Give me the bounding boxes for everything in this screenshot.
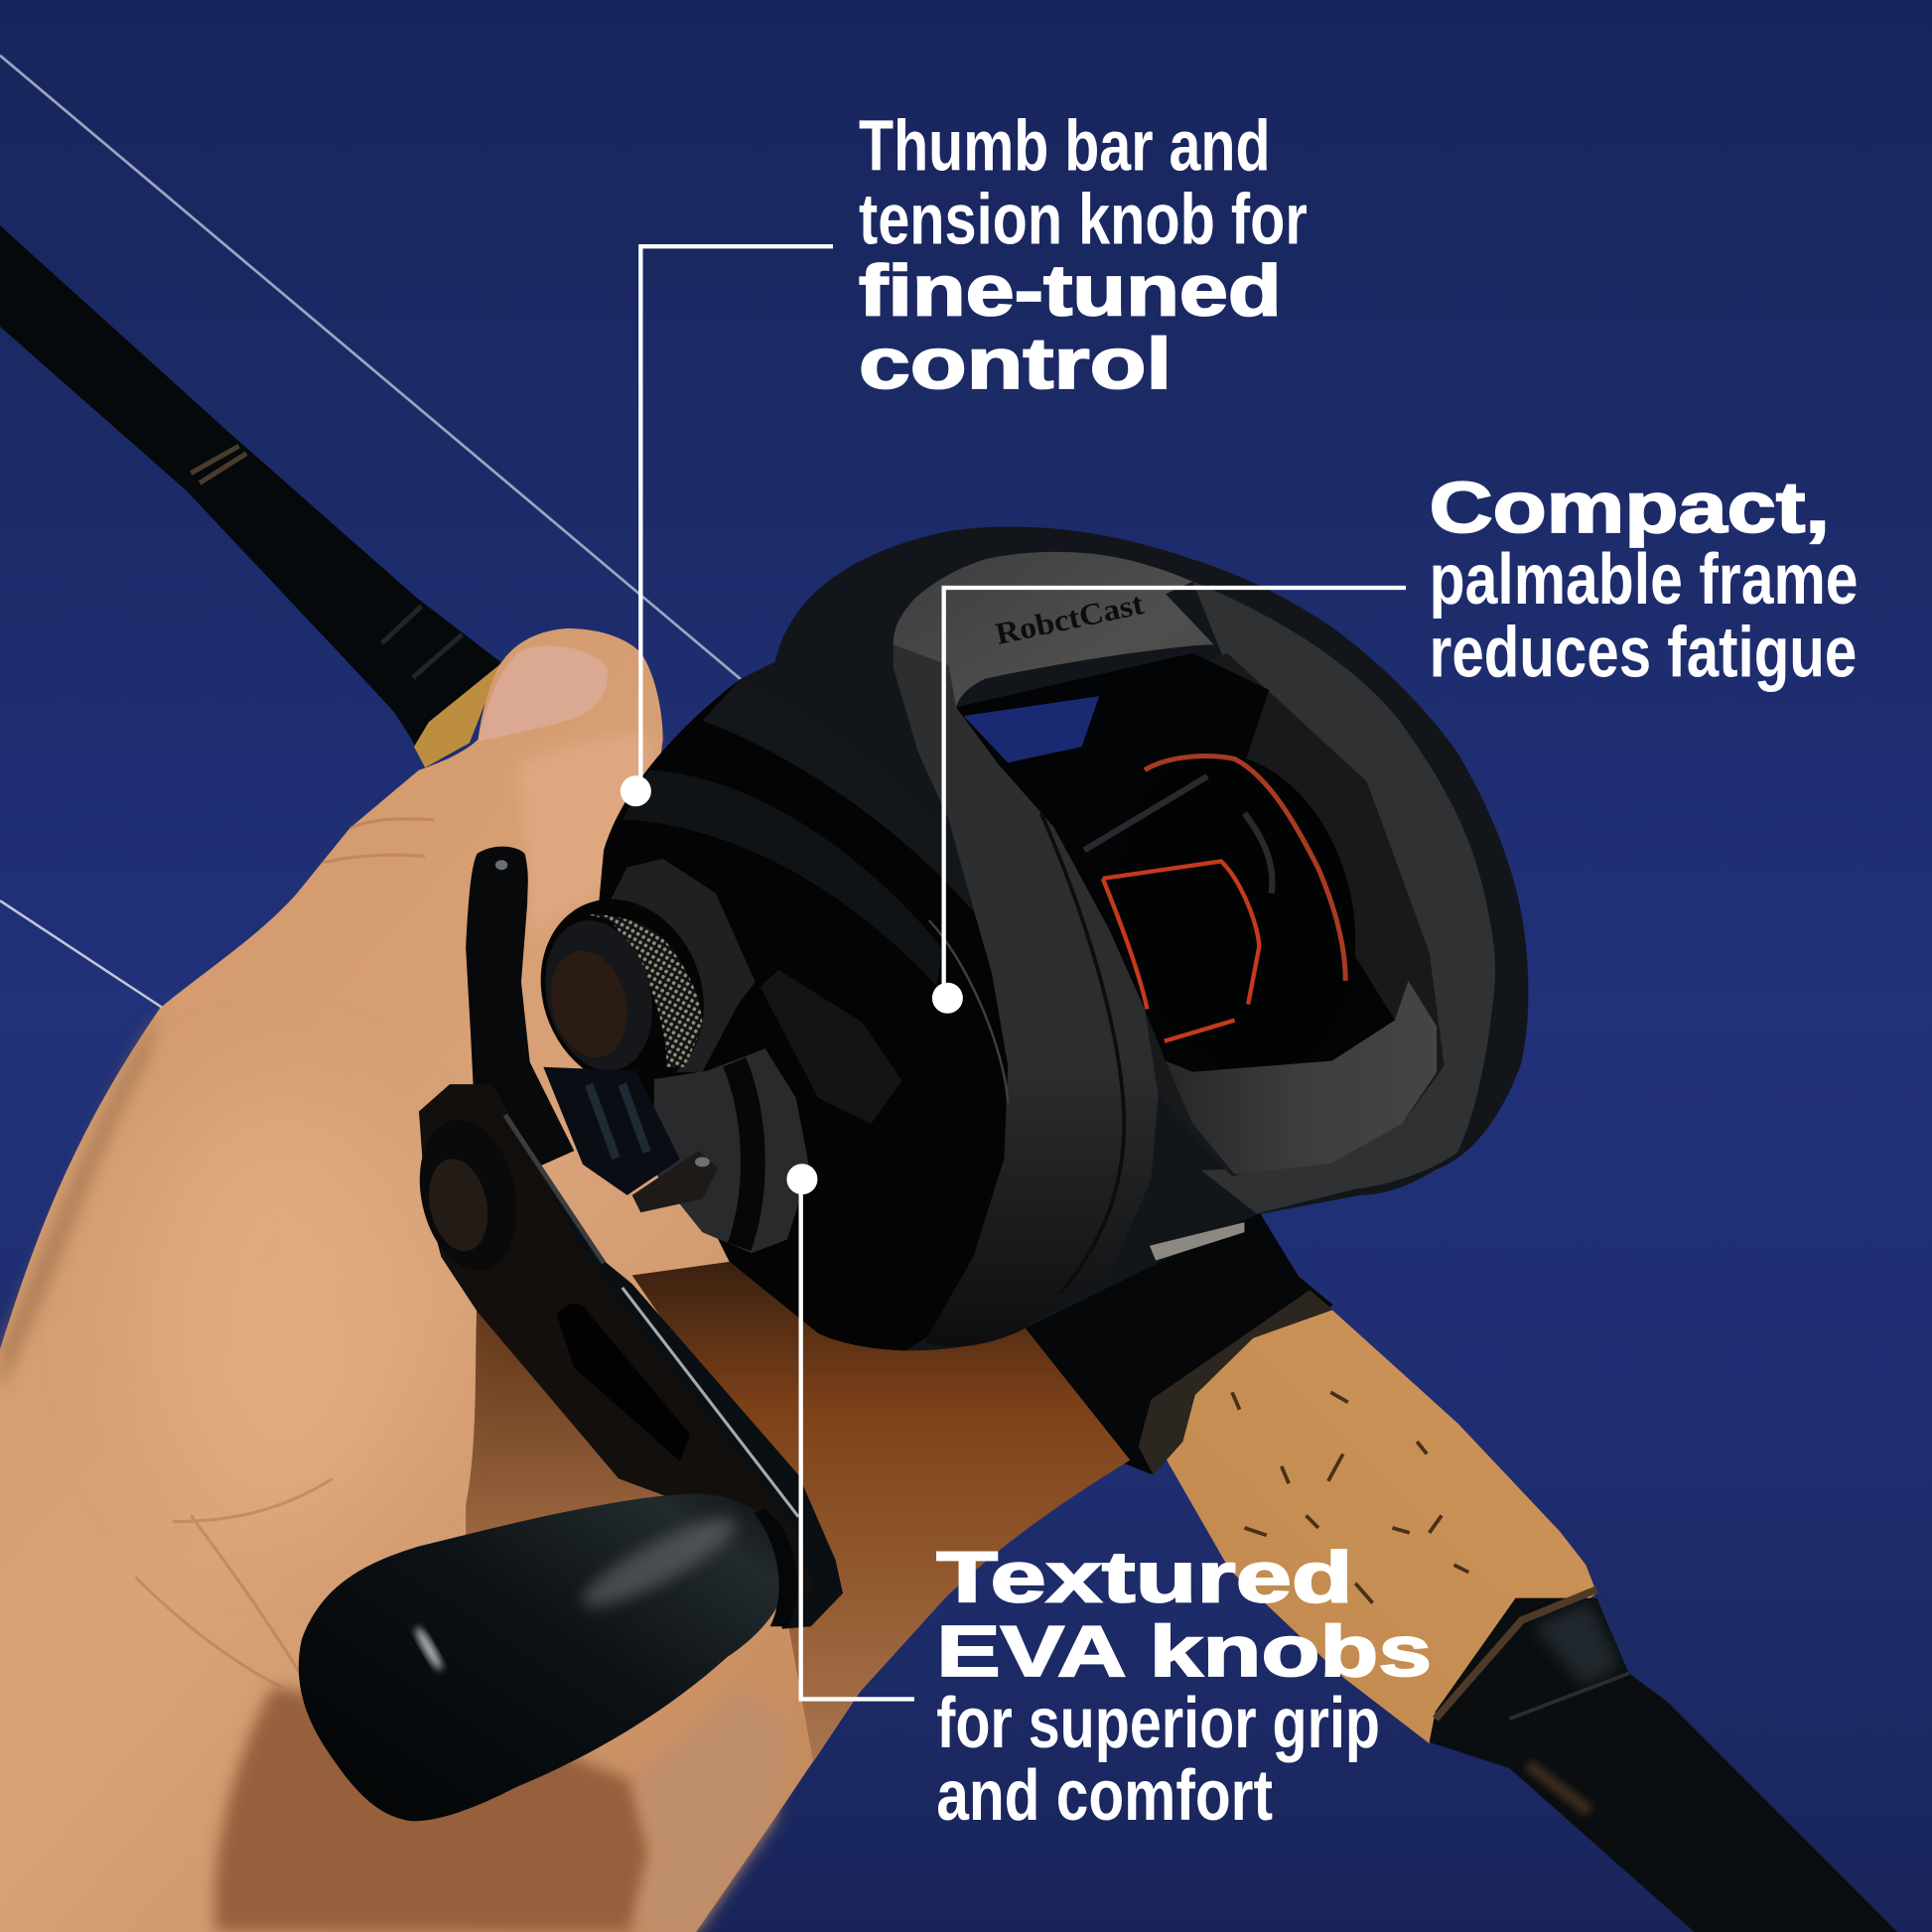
callout: thumb bar and tension knob: control <box>859 325 1172 404</box>
spool disc <box>1087 728 1389 1096</box>
palm shade at left edge <box>0 1008 160 1392</box>
lower grey thumb rest <box>1166 981 1437 1174</box>
handle knob <box>299 1493 797 1821</box>
callout: EVA knobs: Textured <box>936 1538 1353 1617</box>
reel <box>513 526 1528 1350</box>
callout: compact frame: Compact, <box>1430 469 1830 548</box>
shoulder ridge <box>702 679 973 911</box>
palm highlight <box>142 1097 413 1516</box>
fishing line upper <box>0 56 742 680</box>
grey cylinder <box>653 1048 809 1253</box>
sky through frame <box>964 696 1099 762</box>
cork collar <box>414 664 500 767</box>
callout: compact frame <box>1430 469 1859 692</box>
hand <box>0 628 1130 1932</box>
rod butt <box>1430 1598 1897 1932</box>
star drag <box>543 1067 680 1195</box>
callout: thumb bar and tension knob <box>859 106 1308 404</box>
cork <box>1154 1310 1596 1743</box>
knurled ring <box>588 914 702 1067</box>
seat <box>1018 1210 1333 1475</box>
fishing line lower <box>0 900 163 1008</box>
reel outer silhouette <box>592 526 1528 1350</box>
window interior <box>956 653 1395 1072</box>
handle <box>406 847 843 1629</box>
callout: EVA knobs: EVA knobs <box>936 1612 1432 1692</box>
right grey band <box>1192 582 1495 1213</box>
callout: EVA knobs <box>936 1538 1432 1836</box>
pivot nut <box>406 1111 530 1280</box>
callout: thumb bar and tension knob: tension knob for <box>859 181 1308 260</box>
upper rod blank <box>0 225 500 767</box>
arm edge <box>530 1151 843 1626</box>
seat clip highlight <box>1150 1222 1244 1261</box>
thumb lever <box>466 847 574 1171</box>
callout: thumb bar and tension knob: Thumb bar and <box>859 106 1271 186</box>
thumb skin <box>517 735 655 936</box>
fold between palm and fingers <box>466 1307 690 1555</box>
leader line: thumb bar <box>621 246 833 806</box>
arm slot <box>557 1304 690 1461</box>
tension knob cap <box>530 909 667 1082</box>
top grey bar <box>894 552 1213 752</box>
spool red rims <box>1145 757 1345 981</box>
leader line: compact frame <box>932 588 1406 1014</box>
lit finger below knob <box>633 1688 788 1932</box>
lower rod grip: cork handle and butt <box>1018 1210 1897 1932</box>
leader line: EVA knobs <box>786 1164 914 1699</box>
shaded fingers under reel <box>632 1262 1130 1762</box>
tension knob cone <box>592 859 756 1072</box>
second ridge <box>622 770 942 986</box>
front frame band <box>894 644 1159 1346</box>
big hub <box>760 970 901 1124</box>
small lever <box>632 1151 719 1212</box>
callout: thumb bar and tension knob: fine-tuned <box>859 252 1282 332</box>
side plate black cover <box>592 679 1023 1350</box>
shadow under knob <box>214 1687 652 1932</box>
callout: EVA knobs: and comfort <box>936 1756 1273 1836</box>
handle arm <box>419 1084 843 1629</box>
spool highlights <box>1084 776 1272 894</box>
palm creases <box>136 819 434 1688</box>
callout: EVA knobs: for superior grip <box>936 1684 1380 1763</box>
thumb nail <box>479 645 608 742</box>
dark cork ring <box>1139 1290 1333 1475</box>
inner dark ring <box>986 653 1445 1176</box>
tension knob black ring <box>513 875 732 1112</box>
brand lettering: RobctCast <box>992 586 1148 651</box>
